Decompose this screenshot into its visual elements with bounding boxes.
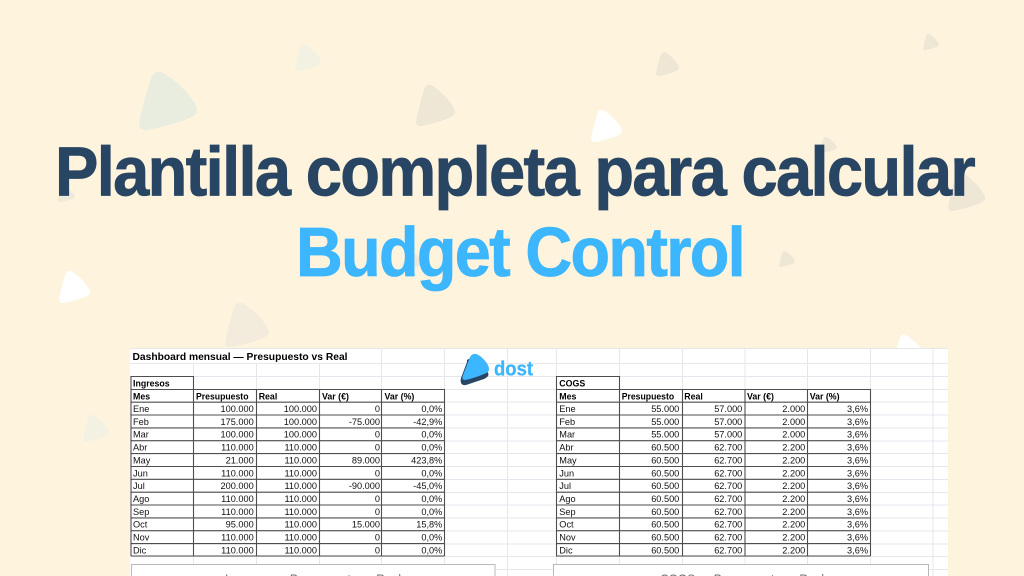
table: cogs: Feb — [559, 417, 575, 427]
table: cogs: 3,6% — [847, 494, 868, 504]
table: cogs: 62.700 — [714, 507, 742, 517]
table: ingresos: -45,0% — [413, 481, 442, 491]
table: ingresos: 0 — [375, 507, 380, 517]
icon: logo mark — [461, 354, 489, 385]
table: ingresos: Ene — [133, 404, 149, 414]
table: ingresos: 0 — [375, 468, 380, 478]
table: cogs: 3,6% — [847, 545, 868, 555]
table: cogs: Nov — [559, 533, 576, 543]
table: cogs: 2.200 — [782, 455, 805, 465]
table: cogs: 2.000 — [782, 404, 805, 414]
table: cogs: 60.500 — [651, 533, 679, 543]
table: cogs: 60.500 — [651, 481, 679, 491]
table: ingresos: 110.000 — [284, 533, 317, 543]
table: cogs: 57.000 — [714, 404, 742, 414]
table: cogs: 3,6% — [847, 533, 868, 543]
table: cogs: 62.700 — [714, 494, 742, 504]
table: ingresos: 110.000 — [284, 494, 317, 504]
table: ingresos: 110.000 — [221, 494, 254, 504]
table: ingresos: 89.000 — [352, 455, 380, 465]
table: cogs: 60.500 — [651, 507, 679, 517]
table: cogs: May — [559, 455, 577, 465]
table: ingresos: 175.000 — [220, 417, 254, 427]
table: ingresos: Presupuesto — [196, 391, 249, 401]
table: ingresos: 0 — [375, 430, 380, 440]
table: ingresos: 15.000 — [352, 520, 380, 530]
table: ingresos: Abr — [133, 443, 147, 453]
table: ingresos: 100.000 — [284, 430, 317, 440]
table: cogs: 2.200 — [782, 520, 805, 530]
table: cogs: Ene — [559, 404, 576, 414]
table: cogs: Mar — [559, 430, 575, 440]
table: cogs: 60.500 — [651, 455, 679, 465]
title: Plantilla completa para calcular — [55, 132, 975, 210]
table: cogs: 3,6% — [847, 468, 868, 478]
table: ingresos: Oct — [133, 520, 148, 530]
table: ingresos: Real — [259, 391, 277, 401]
table: ingresos: Nov — [133, 533, 150, 543]
table: cogs: 57.000 — [714, 417, 742, 427]
table: ingresos: -75.000 — [349, 417, 380, 427]
table: ingresos: 0,0% — [421, 507, 442, 517]
table: cogs: Mes — [559, 391, 577, 401]
table: cogs: 3,6% — [847, 507, 868, 517]
table: cogs: 3,6% — [847, 430, 868, 440]
table: cogs: 2.000 — [782, 417, 805, 427]
table: ingresos: Var (%) — [384, 391, 414, 401]
chart: cogs presupuesto vs real — [554, 564, 928, 576]
table: ingresos: 0 — [375, 404, 380, 414]
table: cogs: 60.500 — [651, 545, 679, 555]
table: ingresos: 110.000 — [284, 443, 317, 453]
table: ingresos: 110.000 — [221, 545, 254, 555]
table: ingresos: 0 — [375, 545, 380, 555]
table: ingresos: 110.000 — [221, 533, 254, 543]
table: ingresos: 100.000 — [284, 404, 317, 414]
sheet title: Dashboard mensual — Presupuesto vs Real — [132, 352, 348, 363]
table: cogs: Var (%) — [810, 391, 840, 401]
table: ingresos: Mes — [133, 391, 150, 401]
table: cogs: Var (€) — [747, 391, 774, 401]
table: cogs: 2.200 — [782, 507, 805, 517]
table: ingresos: 21.000 — [226, 455, 254, 465]
table: cogs: 60.500 — [651, 468, 679, 478]
table: cogs: Jul — [559, 481, 571, 491]
table: cogs: 62.700 — [714, 545, 742, 555]
table: cogs: 57.000 — [714, 430, 742, 440]
table: cogs: 3,6% — [847, 404, 868, 414]
table: cogs: Abr — [559, 443, 574, 453]
table: cogs: 60.500 — [651, 443, 679, 453]
table: cogs: 2.200 — [782, 533, 805, 543]
table: cogs: 62.700 — [714, 481, 742, 491]
chart: ingresos presupuesto vs real — [132, 564, 495, 576]
table: cogs: 2.000 — [782, 430, 805, 440]
table: cogs: 2.200 — [782, 494, 805, 504]
table: ingresos: 110.000 — [284, 481, 317, 491]
table: cogs: 2.200 — [782, 545, 805, 555]
table: cogs: 3,6% — [847, 443, 868, 453]
table: ingresos: May — [133, 455, 151, 465]
table: ingresos: 15,8% — [416, 520, 442, 530]
table: ingresos: 0,0% — [421, 533, 442, 543]
table: ingresos: -90.000 — [349, 481, 380, 491]
table: ingresos: 0 — [375, 494, 380, 504]
table: ingresos: 0,0% — [421, 404, 442, 414]
table: ingresos: 0 — [375, 443, 380, 453]
table: ingresos: 110.000 — [284, 520, 317, 530]
table: ingresos: 100.000 — [220, 430, 254, 440]
table: cogs: COGS — [559, 378, 585, 388]
panel: spreadsheet — [130, 348, 948, 576]
table: cogs: 55.000 — [651, 417, 679, 427]
table: cogs: 62.700 — [714, 468, 742, 478]
table: cogs: Ago — [559, 494, 576, 504]
table: cogs: 62.700 — [714, 443, 742, 453]
table: ingresos: Mar — [133, 430, 149, 440]
table: ingresos: Ingresos — [133, 378, 170, 388]
table: cogs: 3,6% — [847, 481, 868, 491]
table: ingresos: Jun — [133, 468, 148, 478]
table: ingresos: 0 — [375, 533, 380, 543]
table: ingresos: 200.000 — [220, 481, 254, 491]
table: ingresos: 110.000 — [221, 468, 254, 478]
subtitle: Budget Control — [296, 213, 744, 291]
table: cogs: 2.200 — [782, 468, 805, 478]
table: ingresos: 110.000 — [284, 455, 317, 465]
table: cogs: 62.700 — [714, 520, 742, 530]
table: ingresos: 423,8% — [411, 455, 442, 465]
table: ingresos — [131, 376, 444, 556]
table: ingresos: 0,0% — [421, 468, 442, 478]
table: cogs: 2.200 — [782, 443, 805, 453]
table: cogs: 62.700 — [714, 455, 742, 465]
table: cogs: Jun — [559, 468, 574, 478]
table: ingresos: Feb — [133, 417, 149, 427]
table: ingresos: 95.000 — [226, 520, 254, 530]
table: cogs: Oct — [559, 520, 574, 530]
table: ingresos: Sep — [133, 507, 149, 517]
table: ingresos: 0,0% — [421, 545, 442, 555]
table: cogs: 2.200 — [782, 481, 805, 491]
table: ingresos: -42,9% — [413, 417, 442, 427]
table: ingresos: 0,0% — [421, 443, 442, 453]
table: ingresos: 110.000 — [284, 545, 317, 555]
table: ingresos: 110.000 — [221, 443, 254, 453]
table: cogs: Dic — [559, 545, 573, 555]
table: ingresos: Var (€) — [322, 391, 349, 401]
table: cogs: 3,6% — [847, 455, 868, 465]
decorative triangles — [58, 34, 985, 442]
table: ingresos: 110.000 — [221, 507, 254, 517]
table: cogs — [556, 376, 870, 556]
table: ingresos: 100.000 — [220, 404, 254, 414]
table: ingresos: Jul — [133, 481, 145, 491]
table: ingresos: 0,0% — [421, 430, 442, 440]
table: ingresos: Dic — [133, 545, 147, 555]
table: cogs: 55.000 — [651, 430, 679, 440]
table: cogs: 60.500 — [651, 494, 679, 504]
logo: dost — [461, 354, 533, 385]
wordmark: dost — [494, 358, 533, 380]
table: ingresos: 110.000 — [284, 468, 317, 478]
table: ingresos: 100.000 — [284, 417, 317, 427]
table: ingresos: 110.000 — [284, 507, 317, 517]
table: cogs: Real — [684, 391, 703, 401]
table: cogs: Sep — [559, 507, 576, 517]
table: cogs: 3,6% — [847, 417, 868, 427]
table: ingresos: Ago — [133, 494, 149, 504]
table: cogs: Presupuesto — [622, 391, 675, 401]
table: cogs: 3,6% — [847, 520, 868, 530]
table: ingresos: 0,0% — [421, 494, 442, 504]
table: cogs: 62.700 — [714, 533, 742, 543]
table: cogs: 55.000 — [651, 404, 679, 414]
table: cogs: 60.500 — [651, 520, 679, 530]
